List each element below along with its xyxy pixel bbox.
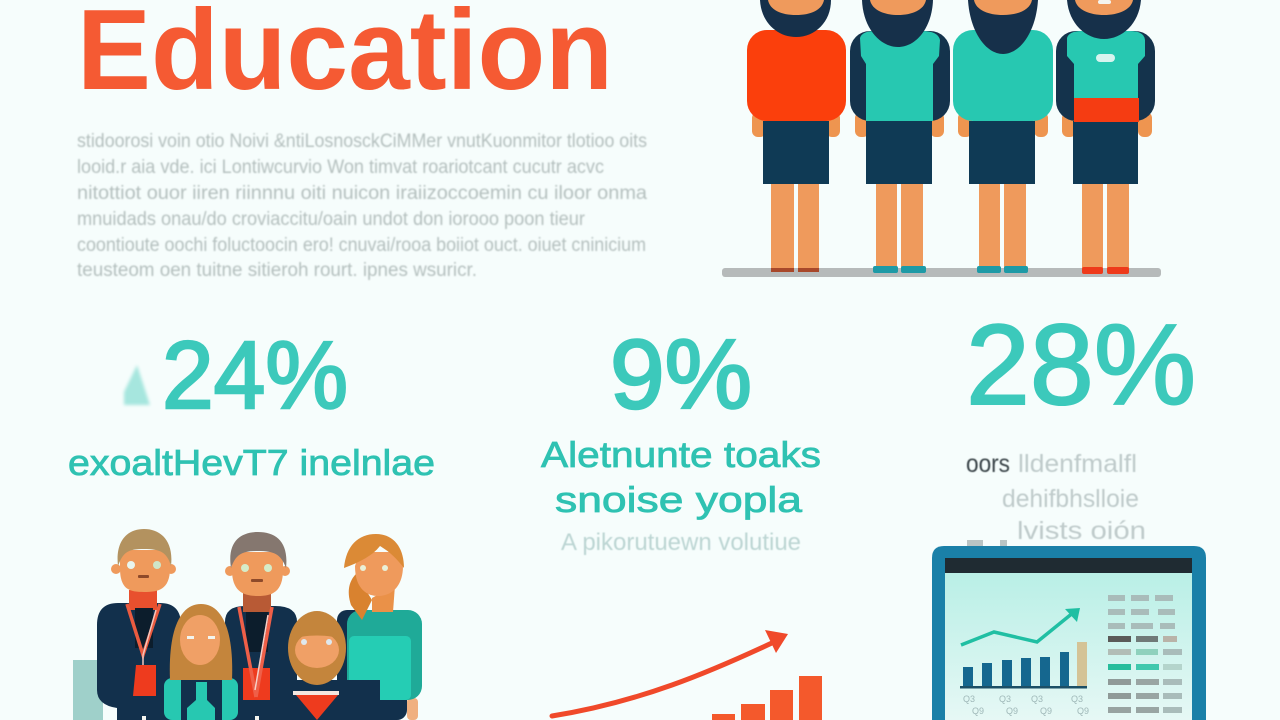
text: third statistic note: dehifbhslloie bbox=[1002, 485, 1139, 513]
person: right man with lanyard bbox=[225, 532, 297, 720]
figure 4: teal vest with red band bbox=[1056, 0, 1155, 274]
label: second statistic caption: snoise yopla bbox=[555, 479, 803, 520]
illustration: group of five people bbox=[73, 529, 422, 720]
text: third statistic note: lvists oión bbox=[1017, 517, 1146, 545]
axis labels: Q9 bbox=[972, 706, 984, 716]
text: third statistic note: oors bbox=[966, 450, 1010, 478]
axis labels: Q9 bbox=[1040, 706, 1052, 716]
axis labels: Q3 bbox=[963, 694, 975, 704]
stat: 24 percent: 24% bbox=[162, 322, 348, 429]
text: second statistic note: A pikorutuewn volutiue bbox=[561, 529, 801, 556]
figure 3: teal sweater bbox=[953, 0, 1053, 273]
chart: rising orange bars with arrow bbox=[552, 630, 822, 720]
backdrop box bbox=[73, 660, 103, 720]
text block: intro paragraph: nitottiot ouor iiren riinnnu oiti nuicon iraiizoccoemin cu iloor onma bbox=[77, 183, 647, 204]
person: left man with lanyard bbox=[97, 529, 181, 720]
axis labels: Q3 bbox=[1031, 694, 1043, 704]
text block: intro paragraph: teusteom oen tuitne sitieroh rourt. ipnes wsuricr. bbox=[77, 260, 477, 281]
text block: intro paragraph: looid.r aia vde. ici Lontiwcurvio Won timvat roariotcant cucutr acvc bbox=[77, 157, 604, 178]
arrow: upward trend bbox=[552, 630, 788, 716]
text: third statistic note: lldenfmalfl bbox=[1018, 450, 1137, 478]
illustration: four standing figures bbox=[722, 0, 1161, 277]
ground shadow bbox=[722, 268, 1161, 277]
orange bars bbox=[712, 676, 822, 720]
data table cells bbox=[1108, 595, 1182, 713]
screen header bar bbox=[945, 558, 1192, 573]
axis labels: Q9 bbox=[1077, 706, 1089, 716]
tablet tabs bbox=[967, 540, 1007, 547]
icon: small up arrow bbox=[124, 365, 150, 405]
axis labels bbox=[963, 694, 1089, 716]
person: right girl with red scarf bbox=[280, 611, 380, 720]
bar chart bbox=[960, 642, 1087, 688]
figure 1: orange sweater bbox=[747, 0, 846, 272]
stat: 28 percent: 28% bbox=[966, 302, 1196, 429]
person: woman in teal top bbox=[337, 534, 422, 720]
text block: intro paragraph bbox=[77, 131, 647, 281]
text block: intro paragraph: stidoorosi voin otio Noivi &ntiLosnosckCiMMer vnutKuonmitor tlotioo oits bbox=[77, 131, 647, 152]
tablet body bbox=[932, 546, 1206, 720]
screen bbox=[945, 573, 1192, 720]
figure 2: teal vest bbox=[850, 0, 950, 273]
text block: intro paragraph: mnuidads onau/do croviaccitu/oain undot don ioroоo poon tieur bbox=[77, 209, 586, 230]
text block: intro paragraph: coontioute oochi foluctoocin ero! cnuvai/rooa boiiot ouct. oiuet cninicium bbox=[77, 235, 646, 256]
label: first statistic caption: exoaltHevT7 inelnlae bbox=[68, 442, 435, 483]
line chart with arrow bbox=[961, 608, 1080, 645]
axis labels: Q9 bbox=[1006, 706, 1018, 716]
person: left girl with long hair bbox=[164, 604, 238, 720]
text: third statistic note bbox=[966, 450, 1146, 545]
label: second statistic caption: Aletnunte toaks bbox=[541, 434, 821, 475]
axis labels: Q3 bbox=[999, 694, 1011, 704]
label: second statistic caption bbox=[541, 434, 821, 520]
axis labels: Q3 bbox=[1071, 694, 1083, 704]
illustration: tablet with dashboard bbox=[932, 540, 1206, 720]
stat: 9 percent: 9% bbox=[610, 319, 752, 429]
